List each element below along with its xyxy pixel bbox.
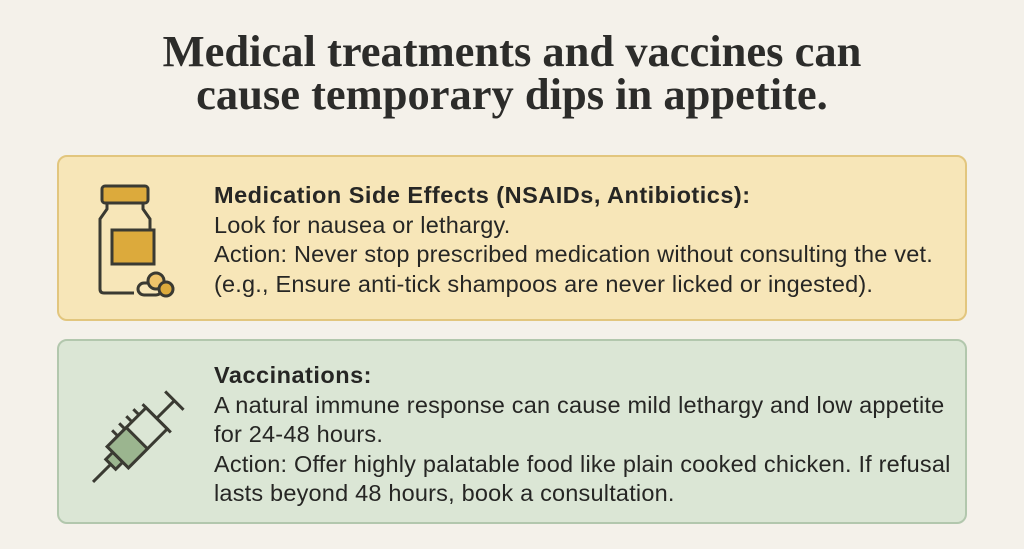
icon: syringe [92, 390, 184, 483]
text: medication: Look for nausea or lethargy. [214, 212, 510, 238]
text: medication: Action: Never stop prescribed medication without consulting the vet. [214, 241, 933, 267]
title [163, 26, 861, 119]
text: vaccinations: Action: Offer highly palatable food like plain cooked chicken. If refusal [214, 450, 951, 476]
text: vaccinations [214, 362, 951, 506]
text: medication: (e.g., Ensure anti-tick shampoos are never licked or ingested). [214, 270, 873, 296]
text: vaccinations: A natural immune response can cause mild lethargy and low appetite [214, 392, 944, 418]
title: Medical treatments and vaccines can [163, 26, 861, 76]
text: vaccinations: Vaccinations: [214, 362, 372, 388]
text: medication [214, 182, 933, 297]
title: cause temporary dips in appetite. [196, 69, 828, 119]
panel: vaccinations [57, 339, 967, 524]
text: vaccinations: for 24-48 hours. [214, 421, 383, 447]
icon: medicine bottle with pills [98, 184, 174, 298]
text: medication: Medication Side Effects (NSAIDs, Antibiotics): [214, 182, 751, 208]
panel: medication side effects [57, 155, 967, 321]
text: vaccinations: lasts beyond 48 hours, book a consultation. [214, 480, 675, 506]
